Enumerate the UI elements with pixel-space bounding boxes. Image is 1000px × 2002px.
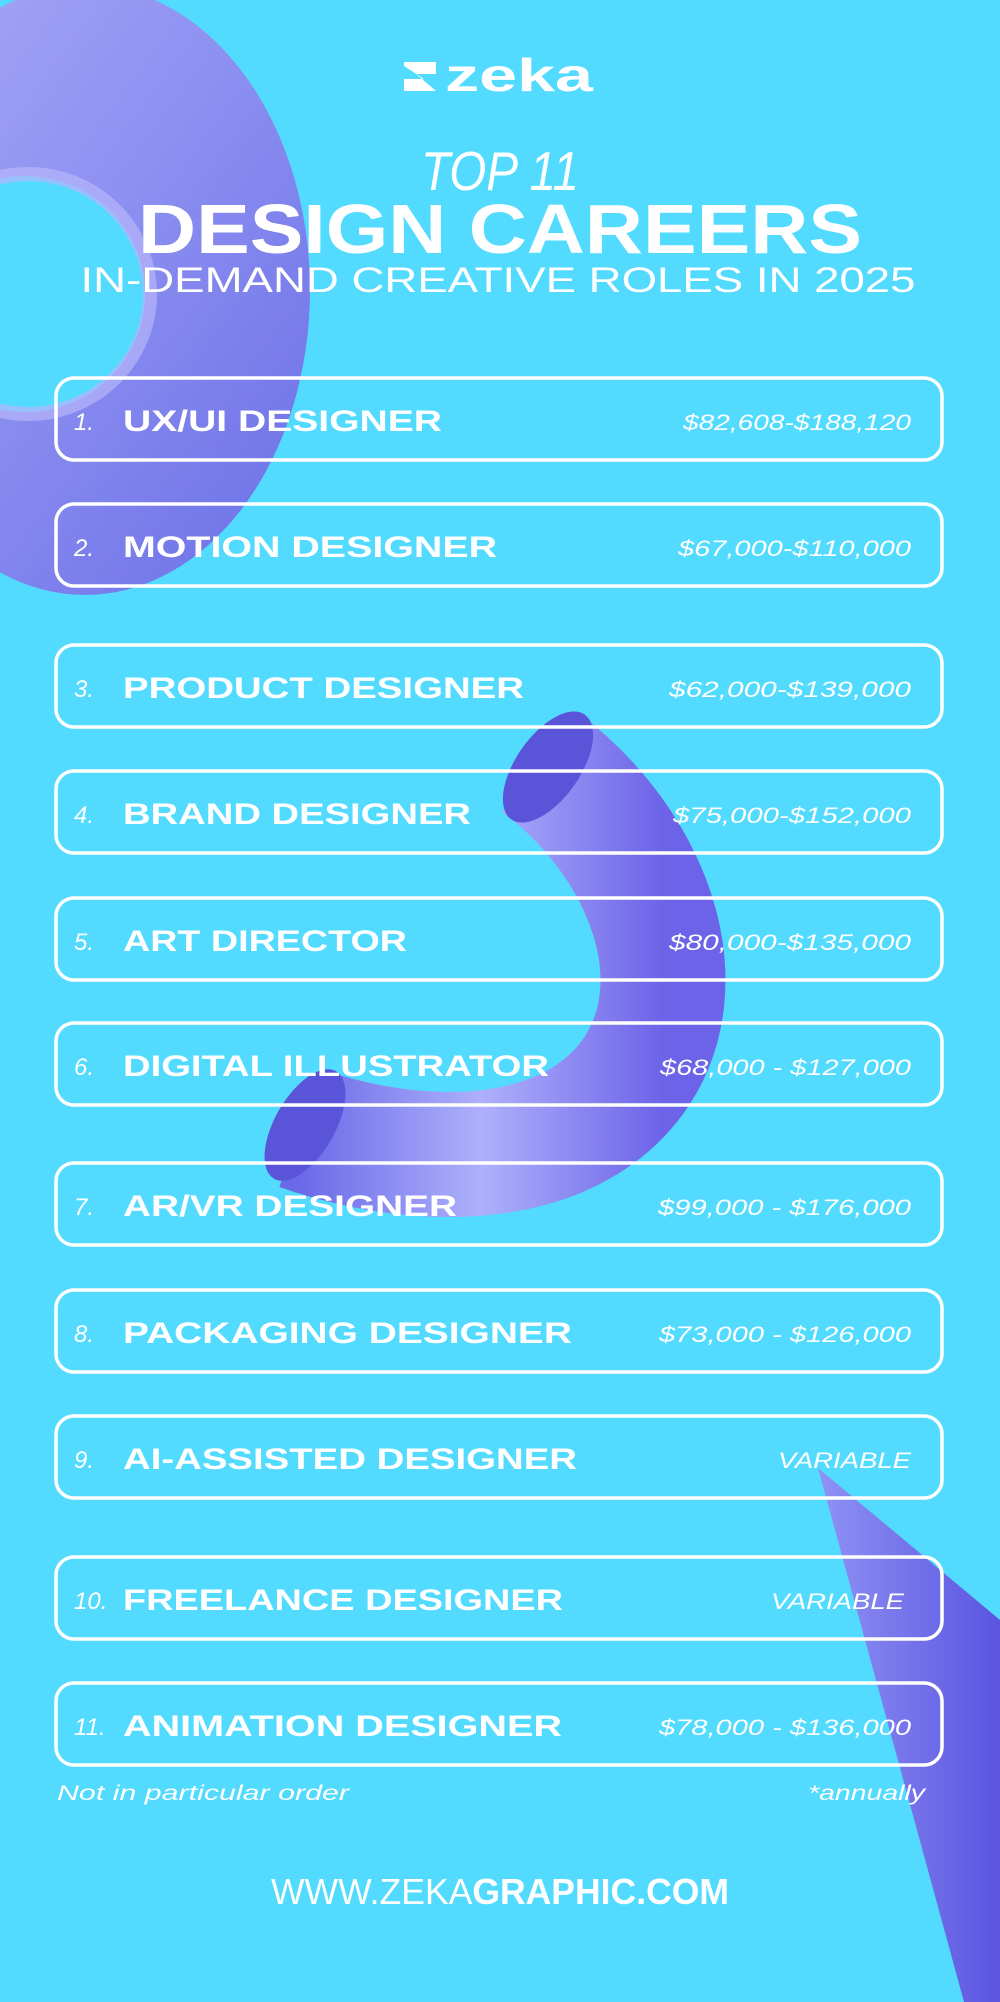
row 4: $75,000-$152,000 xyxy=(672,803,912,828)
row 7 xyxy=(56,1163,942,1245)
row 1 xyxy=(56,378,942,460)
row 2 xyxy=(56,504,942,586)
torus shape top-left xyxy=(0,0,310,595)
row 10 xyxy=(56,1557,942,1639)
title: DESIGN CAREERS xyxy=(138,190,862,268)
row 3: $62,000-$139,000 xyxy=(668,677,912,702)
row 6: $68,000 - $127,000 xyxy=(659,1055,912,1080)
row 11: $78,000 - $136,000 xyxy=(658,1715,912,1740)
row 9: 9. xyxy=(74,1447,94,1474)
row 3: PRODUCT DESIGNER xyxy=(123,672,524,705)
row 2: MOTION DESIGNER xyxy=(123,531,497,564)
row 1: $82,608-$188,120 xyxy=(682,410,912,435)
title: TOP 11 xyxy=(421,140,579,202)
row 6 xyxy=(56,1023,942,1105)
row 2: 2. xyxy=(73,535,94,562)
row 1: UX/UI DESIGNER xyxy=(123,405,442,438)
footnote left: Not in particular order xyxy=(57,1782,350,1805)
row 10: 10. xyxy=(74,1588,107,1615)
row 5: $80,000-$135,000 xyxy=(668,930,912,955)
row 10: FREELANCE DESIGNER xyxy=(123,1584,563,1617)
row 8: 8. xyxy=(74,1321,94,1348)
row 5: ART DIRECTOR xyxy=(123,925,407,958)
row 3 xyxy=(56,645,942,727)
footer url: WWW.ZEKAGRAPHIC.COM xyxy=(271,1871,729,1912)
footnote right: *annually xyxy=(808,1782,927,1805)
row 9 xyxy=(56,1416,942,1498)
title: IN-DEMAND CREATIVE ROLES IN 2025 xyxy=(80,261,915,300)
row 4: 4. xyxy=(74,802,94,829)
row 2: $67,000-$110,000 xyxy=(677,536,912,561)
career list xyxy=(56,378,942,1765)
row 7: $99,000 - $176,000 xyxy=(657,1195,912,1220)
logo xyxy=(404,49,594,101)
row 6: 6. xyxy=(74,1054,94,1081)
row 9: AI-ASSISTED DESIGNER xyxy=(123,1443,577,1476)
row 3: 3. xyxy=(74,676,94,703)
row 5 xyxy=(56,898,942,980)
row 11: 11. xyxy=(74,1714,106,1741)
row 4 xyxy=(56,771,942,853)
cone shape bottom-right xyxy=(818,1468,1000,2002)
row 5: 5. xyxy=(74,929,94,956)
row 7: AR/VR DESIGNER xyxy=(123,1190,457,1223)
row 6: DIGITAL ILLUSTRATOR xyxy=(123,1050,549,1083)
row 8: PACKAGING DESIGNER xyxy=(123,1317,572,1350)
row 8: $73,000 - $126,000 xyxy=(658,1322,912,1347)
row 4: BRAND DESIGNER xyxy=(123,798,471,831)
title xyxy=(80,140,915,300)
row 9: VARIABLE xyxy=(778,1448,911,1473)
curved tube shape xyxy=(248,696,663,1194)
row 10: VARIABLE xyxy=(771,1589,904,1614)
row 8 xyxy=(56,1290,942,1372)
row 1: 1. xyxy=(74,409,94,436)
row 7: 7. xyxy=(74,1194,94,1221)
row 11: ANIMATION DESIGNER xyxy=(123,1710,562,1743)
row 11 xyxy=(56,1683,942,1765)
logo: zeka xyxy=(445,49,594,101)
